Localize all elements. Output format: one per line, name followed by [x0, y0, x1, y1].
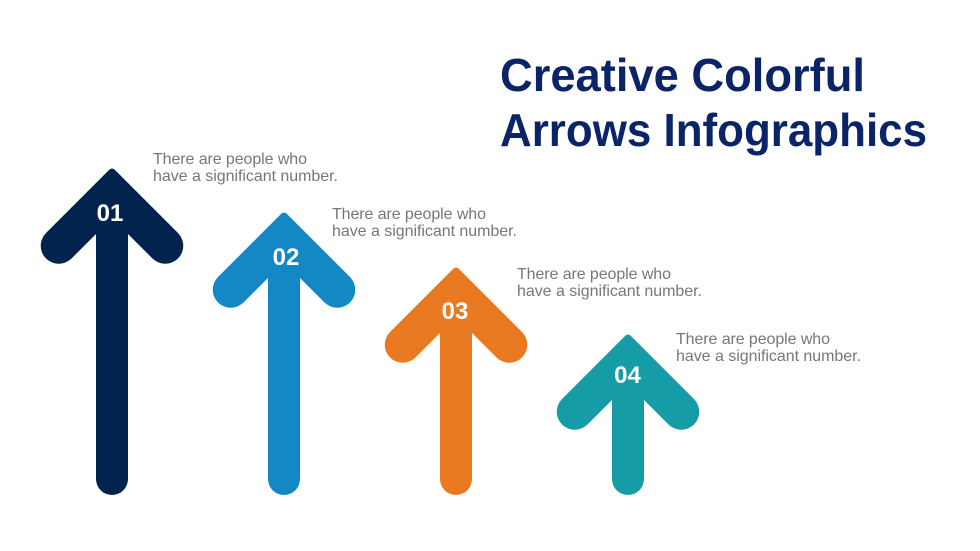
text block 02: There are people who: [332, 206, 486, 223]
text block 04: There are people who: [676, 331, 830, 348]
text block 01: have a significant number.: [153, 168, 338, 185]
text block 03: [517, 266, 702, 300]
text block 04: have a significant number.: [676, 348, 861, 365]
title: Arrows Infographics: [500, 104, 927, 156]
title: [500, 49, 927, 156]
text block 03: have a significant number.: [517, 283, 702, 300]
number 03: 03: [442, 298, 468, 325]
text block 03: There are people who: [517, 266, 671, 283]
arrow 02: blue: [213, 212, 355, 495]
text block 04: [676, 331, 861, 365]
text block 02: have a significant number.: [332, 223, 517, 240]
number 04: 04: [614, 362, 641, 389]
number 01: 01: [97, 200, 123, 227]
text block 01: [153, 151, 338, 185]
title: Creative Colorful: [500, 49, 865, 101]
text block 01: There are people who: [153, 151, 307, 168]
number 02: 02: [273, 244, 299, 271]
arrow 03: orange: [385, 268, 527, 495]
arrow 01: navy: [41, 168, 183, 495]
arrow 04: teal: [557, 334, 699, 495]
text block 02: [332, 206, 517, 240]
